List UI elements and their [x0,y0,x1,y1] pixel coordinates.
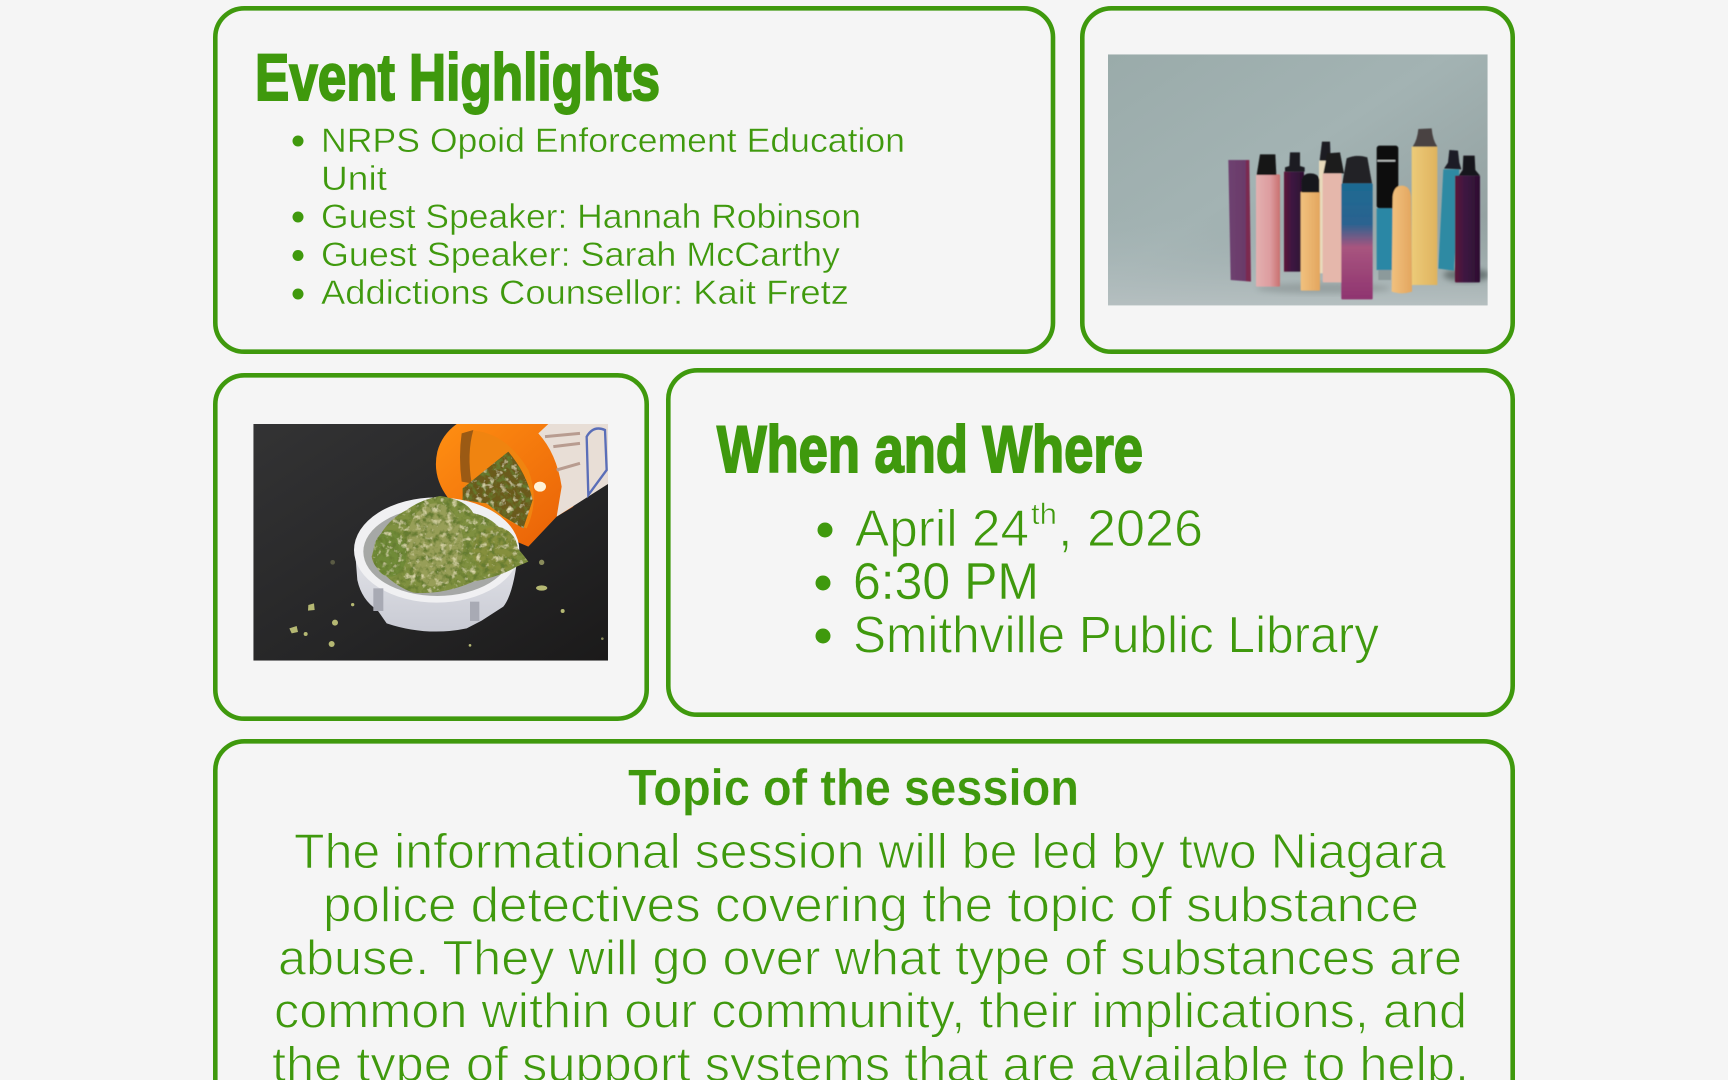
bullet list: highlights: Unit [321,160,387,198]
heading: Topic of the session: Topic of the session [628,759,1079,816]
date: , 2026 [1058,499,1203,557]
body text: common within our community, their implications, and [274,984,1467,1038]
orange bottle [436,424,608,547]
body text: The informational session will be led by two Niagara [294,825,1447,879]
panel: vape photo [1082,8,1513,352]
scattered crumbs [289,560,604,647]
location: Smithville Public Library [853,606,1379,664]
heading: Event Highlights: Event Highlights [255,40,660,114]
bullet list: highlights: Addictions Counsellor: Kait Fretz [321,274,849,312]
panel border: vape photo [1082,8,1513,352]
panel border: event highlights [215,8,1053,352]
white bottle cap [354,497,519,632]
panel border: topic [215,741,1513,1080]
heading: When and Where: When and Where [717,412,1143,486]
panel border: when and where [668,370,1513,715]
panel: when and where [668,370,1513,715]
bullet list: highlights [292,122,905,312]
bullet list: highlights: NRPS Opoid Enforcement Education [321,122,905,160]
bullet list: highlights: Guest Speaker: Sarah McCarthy [321,236,841,274]
body text: police detectives covering the topic of substance [323,878,1419,932]
time: 6:30 PM [853,552,1039,610]
date [818,498,1203,557]
bullet list: highlights: Guest Speaker: Hannah Robinson [321,198,861,236]
body text [272,825,1469,1080]
panel: topic of the session [215,741,1513,1080]
cannabis buds [372,496,528,593]
photo: pill bottle with cannabis [253,424,608,661]
body text: abuse. They will go over what type of substances are [278,932,1462,986]
panel border: cannabis photo [215,375,647,719]
panel: event highlights [215,8,1053,352]
date: th [1031,498,1057,531]
date: April 24 [855,499,1029,557]
photo: disposable vape pens [1108,54,1490,305]
panel: cannabis photo [215,375,647,719]
